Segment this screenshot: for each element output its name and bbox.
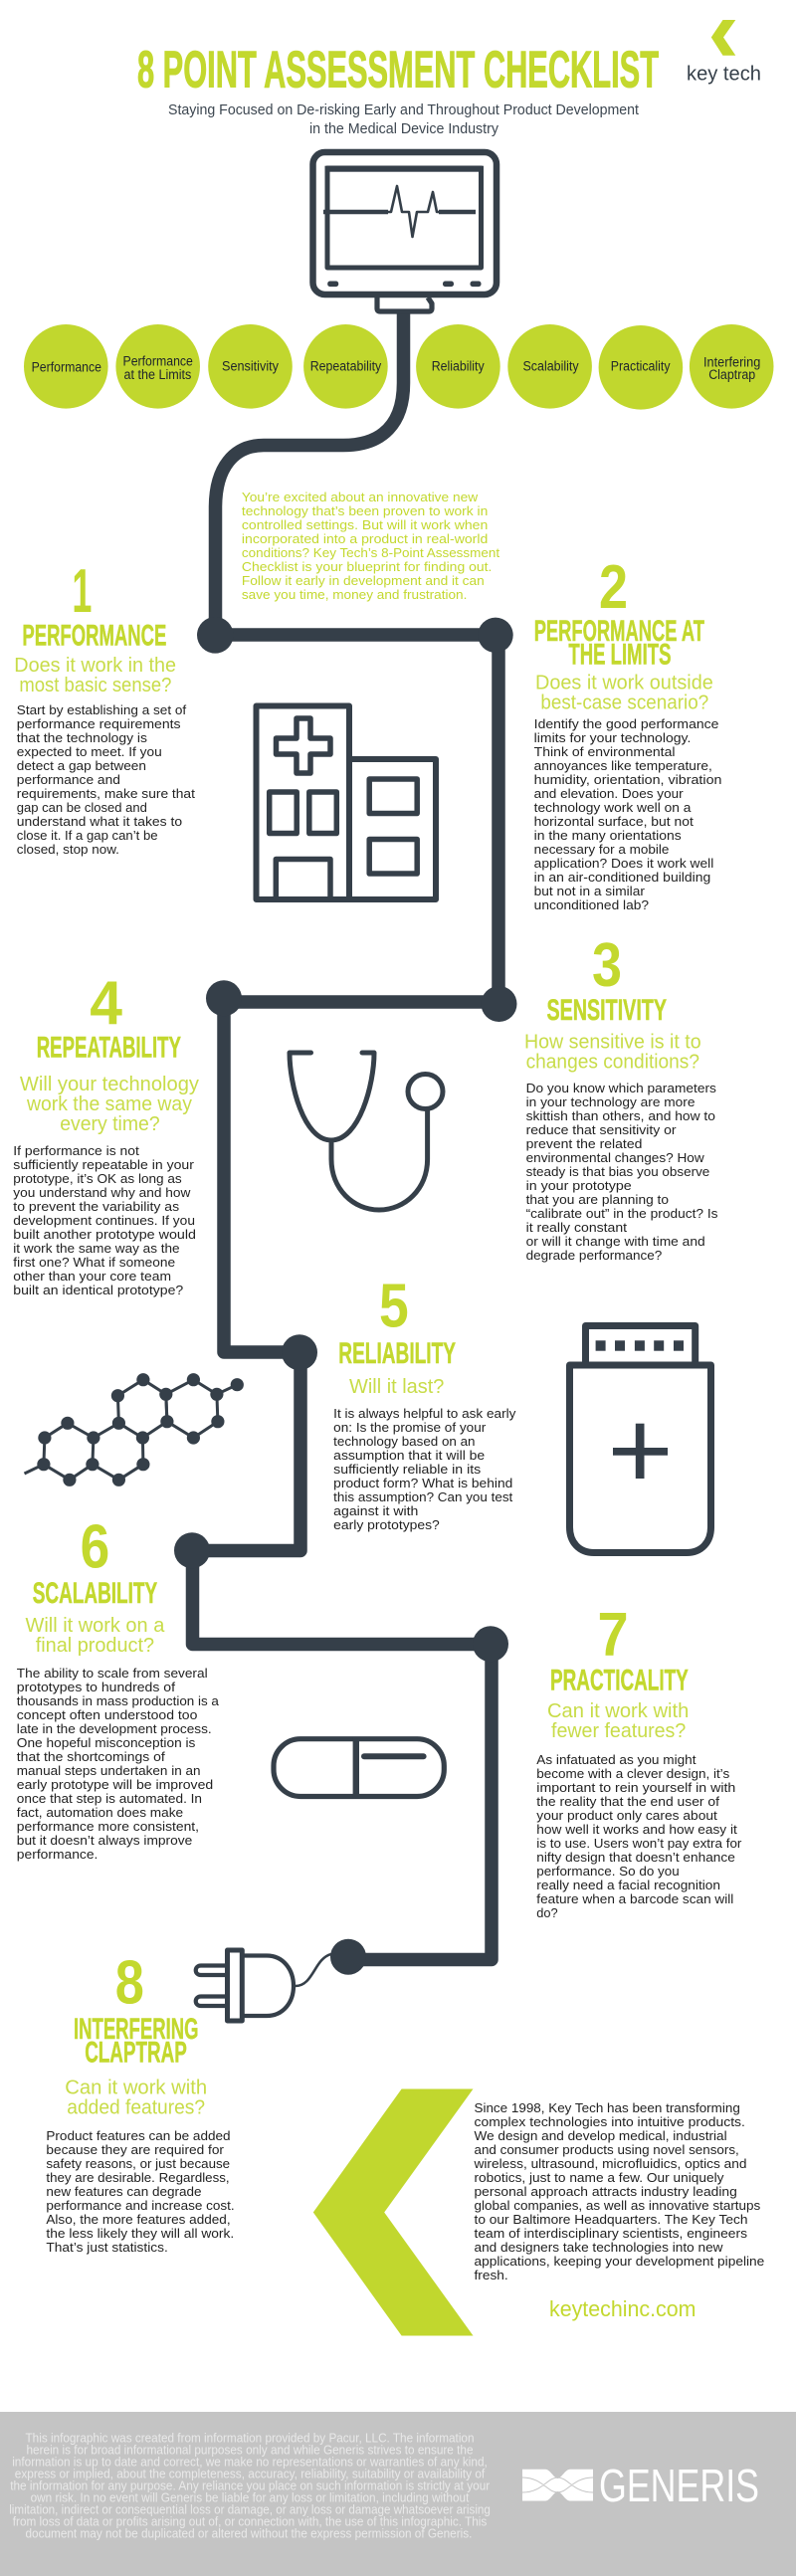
body text <box>333 1406 516 1532</box>
about key tech text: complex technologies into intuitive products. <box>474 2114 745 2129</box>
panel: 8 interfering claptrap <box>46 1948 235 2255</box>
logo: key tech: key tech <box>687 64 761 86</box>
circle: Performance at the Limits: Performance <box>123 354 193 369</box>
panel: 7 practicality <box>536 1601 742 1920</box>
body text: prototype, it’s OK as long as <box>13 1171 182 1186</box>
heading: interfering claptrap: INTERFERING <box>74 2013 199 2046</box>
body text: built an identical prototype? <box>13 1283 183 1297</box>
body text: fact, automation does make <box>17 1805 183 1820</box>
question: Does it work outside <box>535 671 713 694</box>
about key tech text: Since 1998, Key Tech has been transforming <box>474 2100 740 2115</box>
body text: thousands in mass production is a <box>17 1693 220 1708</box>
question: Can it work with <box>65 2076 207 2098</box>
number 7: 7 <box>597 1601 629 1670</box>
body text: That’s just statistics. <box>46 2240 168 2255</box>
body text: safety reasons, or just because <box>46 2156 230 2171</box>
panel: 6 scalability <box>17 1513 220 1862</box>
body text: they are desirable. Regardless, <box>46 2170 230 2185</box>
icon: plug <box>196 1950 331 2021</box>
body text <box>13 1143 196 1297</box>
body text: and elevation. Does your <box>534 786 684 801</box>
question <box>20 1073 200 1135</box>
body text: do? <box>536 1905 558 1920</box>
body text: Also, the more features added, <box>46 2212 231 2227</box>
body text <box>46 2128 235 2255</box>
body text: in the many orientations <box>534 828 682 843</box>
about key tech text: wireless, ultrasound, microfluidics, optics and <box>473 2156 746 2171</box>
body text: your product only cares about <box>536 1808 717 1823</box>
question: Does it work in the <box>14 654 176 677</box>
intro text <box>242 490 499 602</box>
body text: horizontal surface, but not <box>534 814 694 829</box>
body text: it really constant <box>526 1220 628 1235</box>
body text: once that step is automated. In <box>17 1791 202 1806</box>
panel: 2 performance at the limits <box>534 553 722 912</box>
panel: 3 sensitivity <box>524 931 718 1263</box>
icon: pill bottle <box>569 1325 710 1552</box>
body text: reduce that sensitivity or <box>526 1122 677 1137</box>
body text: necessary for a mobile <box>534 842 669 857</box>
body text <box>17 1666 220 1862</box>
about key tech text <box>473 2100 764 2282</box>
body text: humidity, orientation, vibration <box>534 772 722 787</box>
body text: this assumption? Can you test <box>333 1489 513 1504</box>
question: How sensitive is it to <box>524 1030 701 1053</box>
body text: degrade performance? <box>526 1248 662 1263</box>
intro text: Follow it early in development and it can <box>242 573 485 588</box>
body text: application? Does it work well <box>534 856 713 871</box>
heading: performance at the limits: THE LIMITS <box>568 639 671 672</box>
body text: feature when a barcode scan will <box>536 1891 733 1906</box>
question: Will your technology <box>20 1073 200 1095</box>
icon: molecule <box>24 1373 244 1486</box>
disclaimer text: limitation, indirect or consequential loss or damage, or any loss or damage whatsoever arising <box>9 2501 491 2516</box>
body text: is to use. Users won’t pay extra for <box>536 1836 742 1851</box>
body text: performance and increase cost. <box>46 2198 235 2213</box>
body text <box>536 1752 742 1920</box>
body text: limits for your technology. <box>534 730 691 745</box>
body text: first one? What if someone <box>13 1255 175 1270</box>
question: Can it work with <box>547 1699 689 1722</box>
about key tech text: fresh. <box>474 2268 508 2282</box>
body text: performance requirements <box>17 716 181 731</box>
heading: interfering claptrap: CLAPTRAP <box>85 2036 187 2070</box>
body text: but it doesn’t always improve <box>17 1833 192 1848</box>
heading: sensitivity: SENSITIVITY <box>547 994 667 1027</box>
number 3: 3 <box>592 931 622 1000</box>
panel: 1 performance <box>14 557 195 857</box>
question: fewer features? <box>551 1719 686 1742</box>
disclaimer text: document may not be duplicated or altered without the express permission of Generis. <box>26 2525 472 2540</box>
timeline node dots <box>174 617 517 1975</box>
body text: in your prototype <box>526 1178 632 1193</box>
circle: Sensitivity <box>208 324 293 409</box>
circle: Performance at the Limits: at the Limits <box>123 367 192 382</box>
question: Will it work on a <box>26 1614 165 1637</box>
body text <box>534 716 722 912</box>
question: most basic sense? <box>19 674 171 696</box>
body text: really need a facial recognition <box>536 1878 720 1892</box>
body text: development continues. If you <box>13 1213 195 1228</box>
body text: Identify the good performance <box>534 716 718 731</box>
body text: concept often understood too <box>17 1707 197 1722</box>
body text: closed, stop now. <box>17 842 119 857</box>
checklist circles row <box>24 324 774 410</box>
body text: unconditioned lab? <box>534 897 649 912</box>
body text: If performance is not <box>13 1143 139 1158</box>
question: changes conditions? <box>526 1050 699 1073</box>
heading: performance: PERFORMANCE <box>22 619 166 652</box>
heading: reliability: RELIABILITY <box>338 1337 456 1370</box>
icon: patient monitor <box>312 152 497 311</box>
body text: that you are planning to <box>526 1192 669 1207</box>
body text: that the technology is <box>17 730 147 745</box>
number 8: 8 <box>115 1948 144 2017</box>
about key tech text: team of interdisciplinary scientists, engineers <box>474 2226 748 2241</box>
body text: skittish than others, and how to <box>526 1108 715 1123</box>
icon: large green chevron <box>313 2089 474 2336</box>
subtitle <box>168 102 639 137</box>
body text: in your technology are more <box>526 1094 695 1109</box>
about key tech text: applications, keeping your development pipeline <box>474 2254 764 2269</box>
body text: The ability to scale from several <box>17 1666 208 1681</box>
disclaimer text: This infographic was created from information provided by Pacur, LLC. The information <box>26 2430 474 2446</box>
intro text: Checklist is your blueprint for finding out. <box>242 559 492 574</box>
body text: or will it change with time and <box>526 1234 705 1249</box>
body text: prototypes to hundreds of <box>17 1680 175 1694</box>
body text: gap can be closed and <box>17 800 147 815</box>
body text: other than your core team <box>13 1269 171 1284</box>
body text: product form? What is behind <box>333 1476 512 1490</box>
disclaimer text: express or implied, about the completeness, accuracy, reliability, suitability or availability of <box>15 2466 486 2480</box>
circle: Interfering Claptrap: Interfering <box>703 354 760 369</box>
body text: performance more consistent, <box>17 1819 199 1834</box>
body text: how well it works and how easy it <box>536 1822 737 1837</box>
body text: against it with <box>333 1503 418 1518</box>
disclaimer text: own risk. In no event will Generis be liable for any loss or limitation, including without <box>31 2489 470 2504</box>
circle: Repeatability <box>303 324 388 409</box>
heading: scalability: SCALABILITY <box>33 1577 157 1610</box>
circle: Scalability <box>507 324 592 409</box>
circle: Repeatability: Repeatability <box>310 359 381 374</box>
about key tech text: We design and develop medical, industrial <box>474 2128 727 2143</box>
question <box>547 1699 689 1742</box>
disclaimer text <box>9 2430 491 2540</box>
body text: you understand why and how <box>13 1185 191 1200</box>
number 5: 5 <box>379 1272 409 1340</box>
question <box>26 1614 165 1657</box>
body text: on: Is the promise of your <box>333 1420 487 1435</box>
body text: annoyances like temperature, <box>534 758 712 773</box>
body text: technology work well on a <box>534 800 692 815</box>
body text: the reality that the end user of <box>536 1794 719 1809</box>
body text: it work the same way as the <box>13 1241 180 1256</box>
body text: the less likely they will all work. <box>46 2226 234 2241</box>
disclaimer text: the information for any purpose. Any reliance you place on such information is strictly at your <box>10 2477 491 2492</box>
about key tech text: and consumer products using novel sensors, <box>474 2142 739 2157</box>
body text: close it. If a gap can’t be <box>17 828 158 843</box>
body text: prevent the related <box>526 1136 642 1151</box>
footer band <box>0 2412 796 2576</box>
question: Will it last? <box>349 1375 444 1398</box>
disclaimer text: information is up to date and correct, we make no representations or warranties of any kind, <box>12 2455 488 2470</box>
body text: steady is that bias you observe <box>526 1164 709 1179</box>
number 1: 1 <box>72 557 92 626</box>
question: added features? <box>67 2095 205 2118</box>
body text: important to rein yourself in with <box>536 1780 735 1795</box>
subtitle: Staying Focused on De-risking Early and Throughout Product Development <box>168 102 639 118</box>
heading: interfering claptrap <box>74 2013 199 2070</box>
logo: generis <box>522 2460 759 2511</box>
disclaimer text: herein is for broad informational purposes only and while Generis strives to ensure the <box>26 2442 474 2458</box>
body text: new features can degrade <box>46 2184 202 2199</box>
question <box>535 671 713 713</box>
body text: sufficiently reliable in its <box>333 1462 482 1477</box>
body text: because they are required for <box>46 2142 225 2157</box>
body text: detect a gap between <box>17 758 146 773</box>
disclaimer text: from loss of data or profits arising out of, or connection with, the use of this infographic. This <box>13 2513 488 2528</box>
number 2: 2 <box>599 553 628 622</box>
question: final product? <box>36 1634 154 1657</box>
about key tech text: global companies, as well as innovative startups <box>474 2198 761 2213</box>
body text: sufficiently repeatable in your <box>13 1157 195 1172</box>
body text: to prevent the variability as <box>13 1199 180 1214</box>
question: every time? <box>60 1112 160 1135</box>
about key tech text: and designers take technologies into new <box>474 2240 723 2255</box>
intro text: save you time, money and frustration. <box>242 587 467 602</box>
body text <box>17 702 195 857</box>
question <box>14 654 176 696</box>
body text: Start by establishing a set of <box>17 702 187 717</box>
icon: hospital <box>257 706 436 899</box>
icon: stethoscope <box>290 1053 443 1210</box>
question: work the same way <box>26 1092 193 1115</box>
circle: Performance <box>24 324 108 409</box>
intro text: technology that’s been proven to work in <box>242 503 488 518</box>
body text: but not in a similar <box>534 884 646 898</box>
subtitle: in the Medical Device Industry <box>309 121 499 137</box>
about key tech text: robotics, just to name a few. Our uniquely <box>474 2170 724 2185</box>
panel: 5 reliability <box>333 1272 516 1532</box>
circle: Practicality <box>599 325 683 410</box>
body text: environmental changes? How <box>526 1150 704 1165</box>
body text: performance. <box>17 1847 98 1862</box>
body text: Think of environmental <box>534 744 676 759</box>
number 6: 6 <box>81 1513 109 1582</box>
circle: Reliability <box>416 324 500 409</box>
circle: Sensitivity: Sensitivity <box>222 359 279 374</box>
panel: 4 repeatability <box>13 969 200 1297</box>
body text: built another prototype would <box>13 1227 196 1242</box>
icon: capsule <box>274 1737 444 1798</box>
body text: technology based on an <box>333 1434 476 1449</box>
number 4: 4 <box>90 969 122 1038</box>
body text: Product features can be added <box>46 2128 231 2143</box>
body text: late in the development process. <box>17 1721 212 1736</box>
about key tech text: to our Baltimore Headquarters. The Key Tech <box>474 2212 748 2227</box>
body text: expected to meet. If you <box>17 744 162 759</box>
circle: Practicality: Practicality <box>611 359 671 374</box>
logo: key tech <box>687 20 761 86</box>
body text: understand what it takes to <box>17 814 182 829</box>
body text: As infatuated as you might <box>536 1752 696 1767</box>
question <box>524 1030 701 1073</box>
intro text: controlled settings. But will it work when <box>242 517 488 532</box>
body text: manual steps undertaken in an <box>17 1763 200 1778</box>
body text: It is always helpful to ask early <box>333 1406 516 1421</box>
heading: practicality: PRACTICALITY <box>550 1664 689 1696</box>
body text <box>526 1081 718 1263</box>
body text: assumption that it will be <box>333 1448 485 1463</box>
about key tech text: personal approach attracts industry leading <box>474 2184 737 2199</box>
body text: early prototypes? <box>333 1517 440 1532</box>
question <box>65 2076 207 2118</box>
body text: performance. So do you <box>536 1864 680 1879</box>
timeline connector path <box>193 310 498 1960</box>
circle: Interfering Claptrap <box>690 324 774 409</box>
body text: become with a clever design, it’s <box>536 1766 730 1781</box>
circle: Performance at the Limits <box>115 324 200 409</box>
body text: requirements, make sure that <box>17 786 195 801</box>
website link: keytechinc.com <box>549 2296 696 2321</box>
intro text: You’re excited about an innovative new <box>242 490 479 504</box>
intro text: conditions? Key Tech’s 8-Point Assessment <box>242 545 499 560</box>
body text: One hopeful misconception is <box>17 1735 196 1750</box>
heading: performance at the limits <box>534 615 704 672</box>
heading: repeatability: REPEATABILITY <box>37 1032 181 1065</box>
question: best-case scenario? <box>540 691 708 713</box>
body text: nifty design that doesn’t enhance <box>536 1850 735 1865</box>
body text: performance and <box>17 772 120 787</box>
circle: Reliability: Reliability <box>432 359 485 374</box>
intro text: incorporated into a product in real-world <box>242 531 488 546</box>
circle: Scalability: Scalability <box>523 359 579 374</box>
body text: early prototype will be improved <box>17 1777 213 1792</box>
circle: Interfering Claptrap: Claptrap <box>708 367 755 382</box>
circle: Performance: Performance <box>32 360 101 374</box>
body text: in an air-conditioned building <box>534 870 710 885</box>
body text: “calibrate out” in the product? Is <box>526 1206 718 1221</box>
body text: that the shortcomings of <box>17 1749 165 1764</box>
body text: Do you know which parameters <box>526 1081 716 1095</box>
